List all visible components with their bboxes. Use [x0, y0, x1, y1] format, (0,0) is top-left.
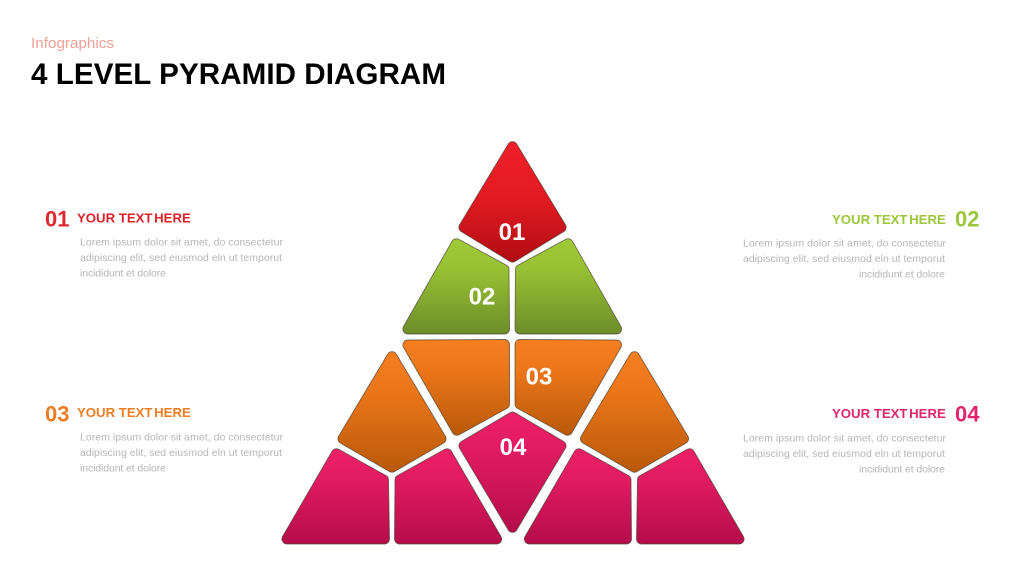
number 02: 02: [955, 206, 979, 232]
level 04 magenta far-right segment: [636, 449, 744, 544]
level 03 orange top-right segment: [515, 340, 622, 435]
level 04 magenta inner-left segment: [394, 449, 502, 544]
level 03 orange right segment: [580, 352, 689, 472]
level 01 red segment: [459, 142, 566, 262]
body 02: incididunt et dolore: [859, 268, 945, 280]
pyramid label 02: 02: [469, 284, 495, 310]
heading 02: YOUR TEXT HERE: [832, 212, 946, 227]
number 01: 01: [45, 206, 69, 232]
level 04 magenta inner-right segment: [524, 449, 632, 544]
heading 04: YOUR TEXT HERE: [832, 406, 946, 421]
level 04 magenta centre segment: [459, 412, 566, 532]
body 02: adipiscing elit, sed eiusmod eln ut temporut: [743, 253, 945, 265]
body 04: incididunt et dolore: [859, 464, 945, 476]
number 04: 04: [955, 402, 980, 426]
level 03 orange top-left segment: [403, 340, 510, 435]
body 03: incididunt et dolore: [80, 462, 166, 474]
body 01: Lorem ipsum dolor sit amet, do consectetur: [80, 236, 284, 248]
level 03 orange left segment: [338, 352, 446, 472]
level 04 magenta far-left segment: [282, 449, 390, 544]
level 02 green right segment: [515, 239, 622, 334]
text block 04: [743, 402, 980, 476]
body 01: incididunt et dolore: [80, 268, 166, 280]
body 02: Lorem ipsum dolor sit amet, do consectetur: [743, 238, 946, 250]
body 03: adipiscing elit, sed eiusmod eln ut temporut: [80, 447, 282, 459]
text block 01: [45, 206, 284, 280]
level 02 green left segment: [403, 239, 510, 334]
pyramid label 04: 04: [500, 434, 527, 461]
number 03: 03: [45, 402, 69, 426]
body 01: [80, 236, 284, 280]
body 03: Lorem ipsum dolor sit amet, do consectetur: [80, 432, 284, 444]
heading 03: YOUR TEXT HERE: [77, 405, 191, 420]
subtitle: Infographics: [31, 35, 114, 52]
text block 03: [45, 402, 284, 474]
body 04: Lorem ipsum dolor sit amet, do consectetur: [743, 432, 946, 444]
heading 01: YOUR TEXT HERE: [77, 210, 191, 226]
pyramid label 03: 03: [526, 364, 552, 390]
body 01: adipiscing elit, sed eiusmod eln ut temporut: [80, 252, 282, 264]
pyramid diagram: [282, 142, 744, 544]
body 04: adipiscing elit, sed eiusmod eln ut temporut: [743, 448, 945, 460]
body 02: [743, 238, 946, 280]
body 04: [743, 432, 946, 476]
pyramid label 01: 01: [499, 219, 525, 246]
text block 02: [743, 206, 979, 280]
body 03: [80, 432, 284, 474]
title: 4 LEVEL PYRAMID DIAGRAM: [31, 58, 446, 91]
